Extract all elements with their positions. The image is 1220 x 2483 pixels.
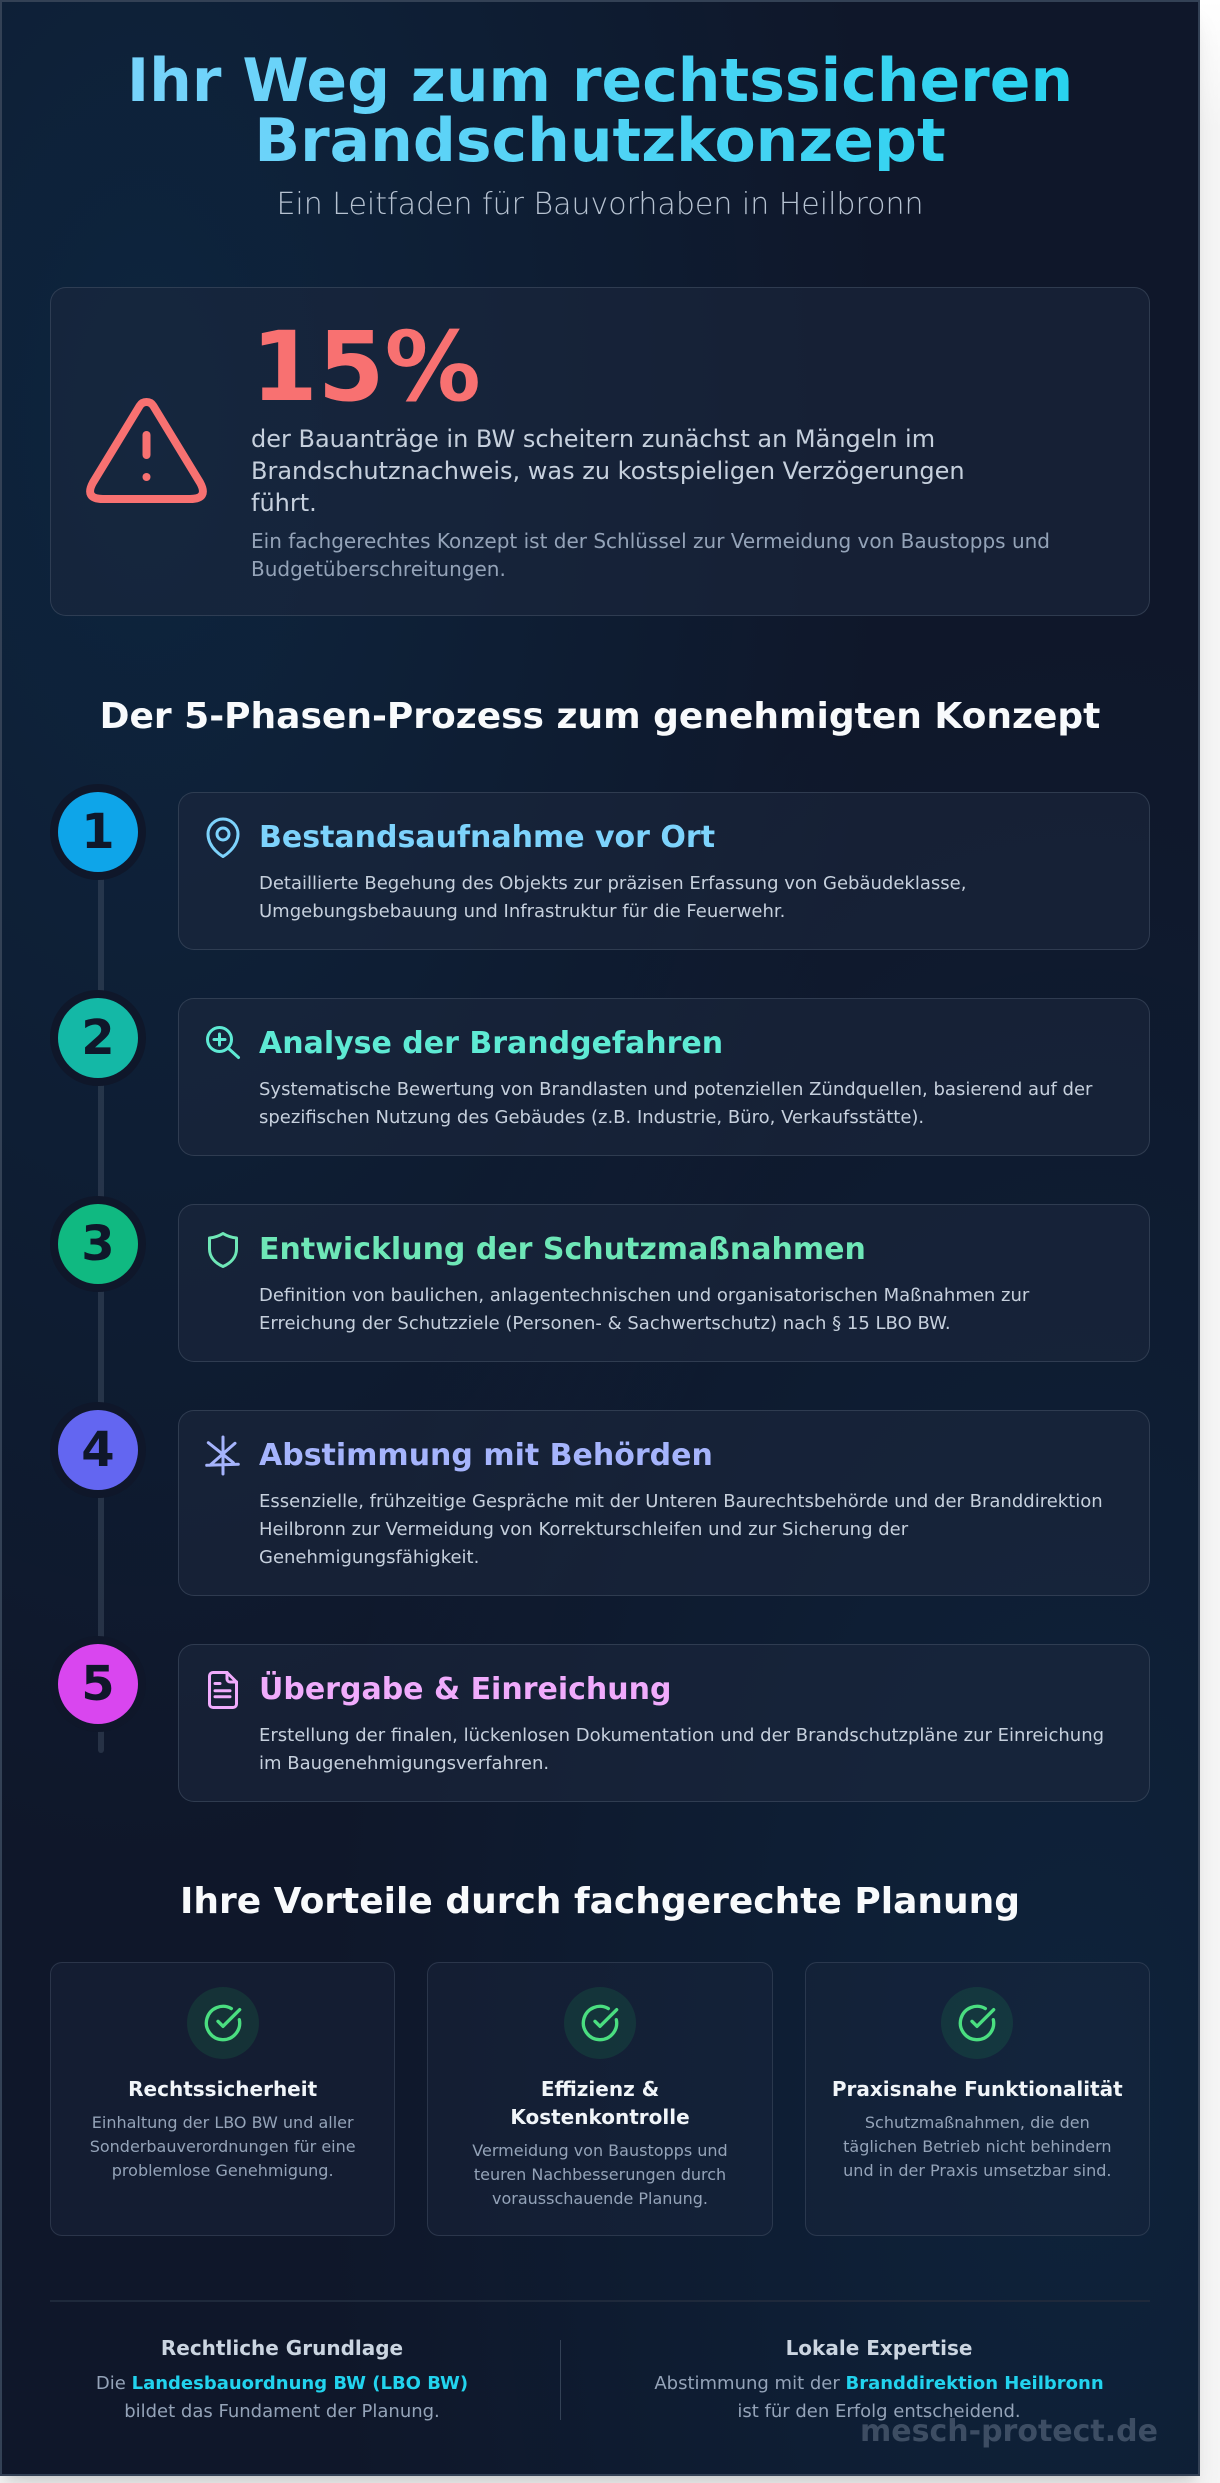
benefit 1 text: problemlose Genehmigung.	[112, 2161, 334, 2180]
step 2 card	[178, 998, 1150, 1156]
benefit card 1	[50, 1962, 395, 2236]
step 2 text: spezifischen Nutzung des Gebäudes (z.B. Industrie, Büro, Verkaufsstätte).	[259, 1107, 924, 1128]
step 1 number: 1	[81, 804, 115, 860]
connector line 3	[98, 1284, 104, 1410]
connector line 2	[98, 1078, 104, 1204]
step 5 text: im Baugenehmigungsverfahren.	[259, 1753, 549, 1774]
step 3 text	[259, 1285, 1030, 1334]
footer left text: Die Landesbauordnung BW (LBO BW)	[96, 2373, 468, 2394]
statistic note: Ein fachgerechtes Konzept ist der Schlüssel zur Vermeidung von Baustopps und	[251, 529, 1050, 553]
step 3 number	[58, 1204, 138, 1284]
benefit 3 text: und in der Praxis umsetzbar sind.	[843, 2161, 1111, 2180]
footer right heading: Lokale Expertise	[786, 2336, 972, 2360]
step 4 number	[58, 1410, 138, 1490]
statistic description: führt.	[251, 489, 317, 517]
step 2 text: Systematische Bewertung von Brandlasten und potenziellen Zündquellen, basierend auf der	[259, 1079, 1092, 1100]
icon: magnifier plus	[206, 1026, 240, 1060]
benefit 3 text: täglichen Betrieb nicht behindern	[843, 2137, 1112, 2156]
statistic description: der Bauanträge in BW scheitern zunächst an Mängeln im	[251, 425, 935, 453]
footer left text: bildet das Fundament der Planung.	[124, 2401, 440, 2422]
benefit 1 text: Einhaltung der LBO BW und aller	[92, 2113, 354, 2132]
step 3 number: 3	[81, 1216, 115, 1272]
step 4 text	[259, 1491, 1103, 1568]
subtitle: Ein Leitfaden für Bauvorhaben in Heilbronn	[276, 187, 924, 222]
step 2 number	[58, 998, 138, 1078]
step 4 title: Abstimmung mit Behörden	[259, 1438, 713, 1473]
step 1 card	[178, 792, 1150, 950]
footer right text: Abstimmung mit der Branddirektion Heilbronn	[654, 2373, 1104, 2394]
benefit 3 text: Schutzmaßnahmen, die den	[865, 2113, 1090, 2132]
step 4 text: Genehmigungsfähigkeit.	[259, 1547, 479, 1568]
icon: asterisk	[205, 1436, 240, 1476]
watermark: mesch-protect.de	[860, 2414, 1158, 2449]
footer right text	[654, 2373, 1104, 2422]
step 4 number: 4	[81, 1422, 115, 1478]
step 5 card	[178, 1644, 1150, 1802]
icon: check 2	[564, 1987, 636, 2059]
benefit 2 text: teuren Nachbesserungen durch	[474, 2165, 726, 2184]
panel: key statistic	[50, 287, 1150, 616]
benefit card 3	[805, 1962, 1150, 2236]
step 5 number: 5	[81, 1656, 115, 1712]
benefit 2 text	[472, 2141, 728, 2208]
step 1 number	[58, 792, 138, 872]
benefit 1 text	[90, 2113, 356, 2180]
benefit 2 title: Kostenkontrolle	[510, 2105, 690, 2129]
connector line 4	[98, 1490, 104, 1644]
step 2 text	[259, 1079, 1092, 1128]
heading: process: Der 5-Phasen-Prozess zum genehmigten Konzept	[100, 696, 1100, 737]
statistic description: Brandschutznachweis, was zu kostspieligen Verzögerungen	[251, 457, 965, 485]
step 1 text	[259, 873, 966, 922]
heading: benefits: Ihre Vorteile durch fachgerechte Planung	[180, 1881, 1020, 1922]
statistic note: Budgetüberschreitungen.	[251, 557, 506, 581]
icon: shield	[208, 1232, 238, 1268]
step 5 number	[58, 1644, 138, 1724]
step 3 card	[178, 1204, 1150, 1362]
step 4 text: Essenzielle, frühzeitige Gespräche mit der Unteren Baurechtsbehörde und der Branddirektion	[259, 1491, 1103, 1512]
icon: map pin	[206, 818, 240, 858]
benefit 2 title: Effizienz &	[541, 2077, 659, 2101]
step 2 number: 2	[81, 1010, 115, 1066]
statistic note	[251, 529, 1050, 581]
step 3 text: Erreichung der Schutzziele (Personen- & Sachwertschutz) nach § 15 LBO BW.	[259, 1313, 951, 1334]
icon: warning triangle	[86, 398, 207, 503]
step 2 title: Analyse der Brandgefahren	[259, 1026, 723, 1061]
benefit card 2	[427, 1962, 773, 2236]
icon: document	[208, 1671, 238, 1709]
step 1 text: Umgebungsbebauung und Infrastruktur für die Feuerwehr.	[259, 901, 785, 922]
step 5 title: Übergabe & Einreichung	[259, 1672, 671, 1707]
step 4 card	[178, 1410, 1150, 1596]
step 3 text: Definition von baulichen, anlagentechnischen und organisatorischen Maßnahmen zur	[259, 1285, 1029, 1306]
icon: check 3	[941, 1987, 1013, 2059]
footer left text	[96, 2373, 468, 2422]
step 4 text: Heilbronn zur Vermeidung von Korrekturschleifen und zur Sicherung der	[259, 1519, 908, 1540]
benefit 2 title	[510, 2077, 690, 2129]
benefit 1 title: Rechtssicherheit	[128, 2077, 317, 2101]
step 1 text: Detaillierte Begehung des Objekts zur präzisen Erfassung von Gebäudeklasse,	[259, 873, 966, 894]
title	[50, 51, 1150, 171]
footer left heading: Rechtliche Grundlage	[161, 2336, 403, 2360]
benefit 2 text: Vermeidung von Baustopps und	[472, 2141, 728, 2160]
step 5 text	[259, 1725, 1104, 1774]
step 5 text: Erstellung der finalen, lückenlosen Dokumentation und der Brandschutzpläne zur Einreichung	[259, 1725, 1104, 1746]
benefit 3 text	[843, 2113, 1112, 2180]
benefit 1 text: Sonderbauverordnungen für eine	[90, 2137, 356, 2156]
title: Ihr Weg zum rechtssicheren	[127, 46, 1073, 116]
title: Brandschutzkonzept	[254, 106, 946, 176]
statistic: 15 percent: 15%	[251, 311, 481, 423]
icon: check 1	[187, 1987, 259, 2059]
benefit 2 text: vorausschauende Planung.	[492, 2189, 708, 2208]
footer right text: ist für den Erfolg entscheidend.	[737, 2401, 1021, 2422]
connector line 5	[98, 1724, 104, 1753]
connector line 1	[98, 872, 104, 998]
benefit 3 title: Praxisnahe Funktionalität	[832, 2077, 1123, 2101]
step 3 title: Entwicklung der Schutzmaßnahmen	[259, 1232, 866, 1267]
step 1 title: Bestandsaufnahme vor Ort	[259, 820, 715, 855]
statistic description	[251, 425, 965, 517]
